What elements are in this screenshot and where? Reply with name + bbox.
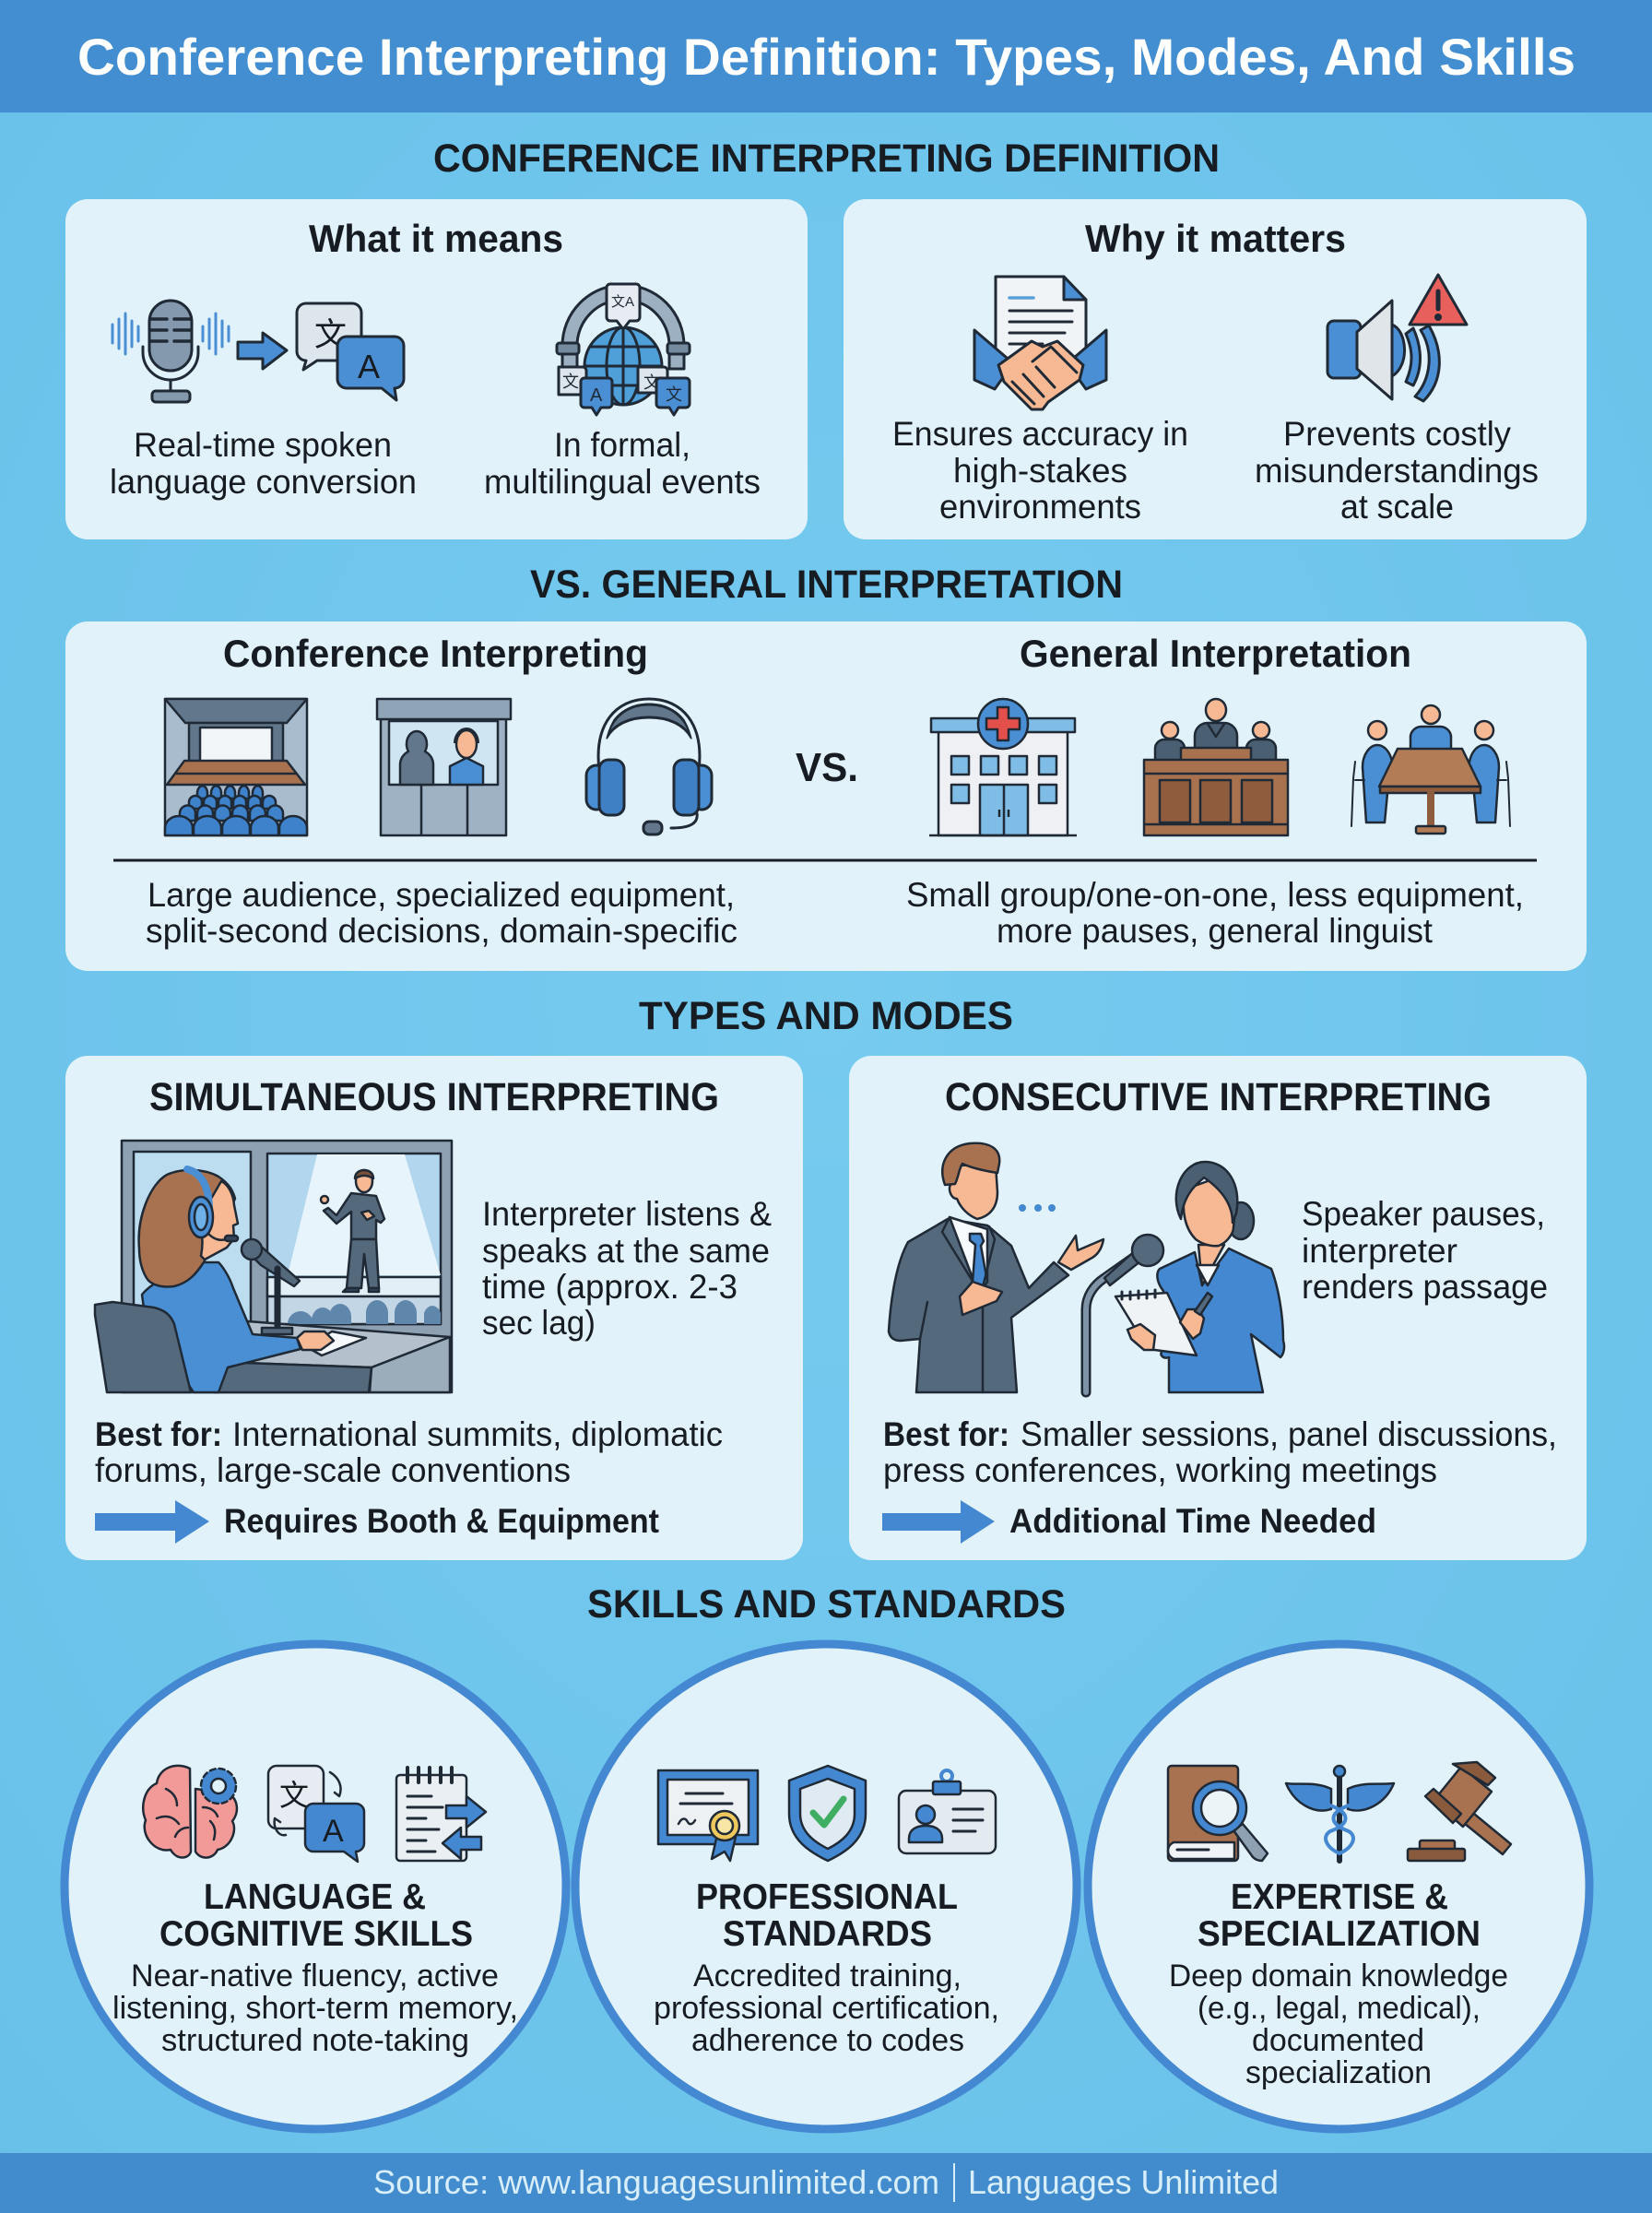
caption: real-time: Real-time spoken — [134, 426, 392, 464]
best for text: Smaller sessions, panel discussions, — [1021, 1415, 1557, 1453]
caption: real-time — [110, 426, 417, 501]
icon: courtroom bench — [1144, 699, 1288, 835]
heading: definition: CONFERENCE INTERPRETING DEFINITION — [433, 136, 1220, 181]
best for text — [95, 1415, 723, 1489]
best for text: International summits, diplomatic — [232, 1415, 723, 1453]
best for text: Best for: — [95, 1415, 222, 1453]
heading: skills and standards: SKILLS AND STANDARDS — [587, 1582, 1066, 1627]
skill title: STANDARDS — [723, 1914, 932, 1954]
left column heading: Conference Interpreting — [223, 632, 648, 675]
female interpreter — [1115, 1162, 1284, 1392]
icon: globe arch — [557, 284, 690, 415]
description text: interpreter — [1302, 1232, 1457, 1270]
skill title — [1198, 1877, 1481, 1954]
illustration: speaker and interpreter — [889, 1143, 1284, 1392]
skill description: documented — [1252, 2023, 1424, 2058]
panel heading: Why it matters — [1085, 217, 1346, 260]
skill title: LANGUAGE & — [204, 1877, 426, 1917]
skill description: professional certification, — [654, 1991, 999, 2026]
icon: notepad with arrows — [396, 1768, 486, 1861]
caption: formal events — [484, 426, 761, 501]
icon: id badge — [899, 1770, 996, 1853]
caption: conference traits: Large audience, specialized equipment, — [148, 876, 735, 914]
caption: misunderstandings — [1255, 415, 1539, 526]
caption: accuracy: high-stakes — [953, 452, 1127, 490]
icon: speaker with warning — [1328, 275, 1467, 401]
skill description: Accredited training, — [693, 1959, 962, 1994]
description text: renders passage — [1302, 1268, 1548, 1306]
title: Conference Interpreting Definition: Types, Modes, And Skills — [77, 28, 1575, 86]
icon: caduceus — [1286, 1766, 1394, 1861]
icon: translation bubbles: 文 — [279, 1779, 309, 1812]
description text: Interpreter listens & — [482, 1195, 772, 1233]
skill description: structured note-taking — [161, 2023, 469, 2058]
icon: translation bubbles — [268, 1766, 364, 1862]
caption: general traits: Small group/one-on-one, less equipment, — [906, 876, 1524, 914]
icon: microphone to translation: 文 — [314, 317, 347, 353]
skill title — [159, 1877, 473, 1954]
icon: document and handshake — [974, 277, 1106, 409]
description text — [482, 1195, 772, 1342]
icon: globe arch: 文A — [611, 294, 634, 310]
skill description: Deep domain knowledge — [1169, 1959, 1508, 1994]
requirement label: Requires Booth & Equipment — [224, 1502, 659, 1540]
arrow — [882, 1500, 995, 1544]
panel: consecutive interpreting — [849, 1056, 1587, 1560]
skill description: adherence to codes — [691, 2023, 964, 2058]
heading: vs general: VS. GENERAL INTERPRETATION — [530, 562, 1123, 607]
caption: general traits — [906, 876, 1524, 950]
caption: misunderstandings: at scale — [1340, 488, 1454, 526]
icon: globe arch: A — [590, 385, 603, 406]
right column heading: General Interpretation — [1020, 632, 1411, 675]
icon: book and magnifier — [1168, 1766, 1268, 1861]
icon: certificate — [658, 1770, 758, 1861]
skill description: Near-native fluency, active — [131, 1959, 499, 1994]
panel: language and cognitive skills — [65, 1644, 566, 2129]
panel: expertise and specialization — [1088, 1644, 1589, 2129]
best for text — [883, 1415, 1557, 1489]
skill title: PROFESSIONAL — [696, 1877, 958, 1917]
illustration: interpreter in booth — [95, 1141, 452, 1392]
caption: conference traits — [146, 876, 738, 950]
icon: globe arch: 文 — [643, 373, 660, 392]
footer band — [0, 2153, 1652, 2213]
panel heading: CONSECUTIVE INTERPRETING — [945, 1075, 1492, 1119]
skill title: COGNITIVE SKILLS — [159, 1914, 473, 1954]
panel heading: SIMULTANEOUS INTERPRETING — [149, 1075, 719, 1119]
caption: accuracy — [892, 415, 1188, 526]
icon: microphone to translation — [112, 301, 404, 402]
panel: comparison — [65, 621, 1587, 971]
speaker on stage — [321, 1170, 384, 1292]
best for text: Best for: — [883, 1415, 1009, 1453]
skill title — [696, 1877, 958, 1954]
icon: translation bubbles: A — [323, 1814, 344, 1849]
icon: shield with check — [789, 1766, 866, 1861]
skill description: specialization — [1245, 2055, 1432, 2090]
description text: sec lag) — [482, 1304, 596, 1342]
skill title: SPECIALIZATION — [1198, 1914, 1481, 1954]
caption: misunderstandings: Prevents costly — [1283, 415, 1511, 453]
icon: hospital — [929, 699, 1077, 835]
heading: types and modes: TYPES AND MODES — [639, 994, 1013, 1038]
best for text: press conferences, working meetings — [883, 1451, 1437, 1489]
icon: meeting table — [1351, 705, 1510, 834]
header band — [0, 0, 1652, 112]
vs label: VS. — [796, 745, 858, 790]
requirement label: Additional Time Needed — [1009, 1502, 1376, 1540]
caption: formal events: multilingual events — [484, 463, 761, 501]
icon: gavel — [1408, 1762, 1511, 1861]
description text: time (approx. 2-3 — [482, 1268, 738, 1306]
icon: globe arch: 文 — [666, 385, 682, 404]
description text: speaks at the same — [482, 1232, 770, 1270]
caption: conference traits: split-second decisions, domain-specific — [146, 912, 738, 950]
skill description — [112, 1959, 518, 2058]
arrow — [95, 1500, 209, 1544]
caption: real-time: language conversion — [110, 463, 417, 501]
brand text: Languages Unlimited — [968, 2163, 1279, 2201]
icon: headset — [586, 699, 712, 834]
best for text: forums, large-scale conventions — [95, 1451, 571, 1489]
caption: general traits: more pauses, general linguist — [997, 912, 1434, 950]
description text — [1302, 1195, 1548, 1306]
male speaker — [889, 1143, 1103, 1392]
skill description: listening, short-term memory, — [112, 1991, 518, 2026]
icon: interpreter booth — [377, 699, 511, 835]
icon: globe arch: 文 — [562, 373, 579, 391]
description text: Speaker pauses, — [1302, 1195, 1545, 1233]
panel: simultaneous interpreting — [65, 1056, 803, 1560]
skill description — [1169, 1959, 1508, 2090]
icon: auditorium — [165, 699, 307, 835]
microphone — [1086, 1235, 1163, 1392]
skill description — [654, 1959, 999, 2058]
panel: professional standards — [575, 1644, 1077, 2129]
caption: misunderstandings: misunderstandings — [1255, 452, 1539, 490]
caption: accuracy: environments — [939, 488, 1141, 526]
dots — [1019, 1204, 1056, 1212]
skill description: (e.g., legal, medical), — [1198, 1991, 1481, 2026]
caption: formal events: In formal, — [554, 426, 690, 464]
panel: what it means — [65, 199, 808, 539]
skill title: EXPERTISE & — [1231, 1877, 1448, 1917]
caption: accuracy: Ensures accuracy in — [892, 415, 1188, 453]
panel: why it matters — [844, 199, 1587, 539]
seated interpreter — [218, 1321, 450, 1367]
panel heading: What it means — [309, 217, 563, 260]
icon: brain with gear — [143, 1766, 237, 1858]
source text: Source: www.languagesunlimited.com — [373, 2163, 939, 2201]
icon: microphone to translation: A — [358, 348, 380, 385]
